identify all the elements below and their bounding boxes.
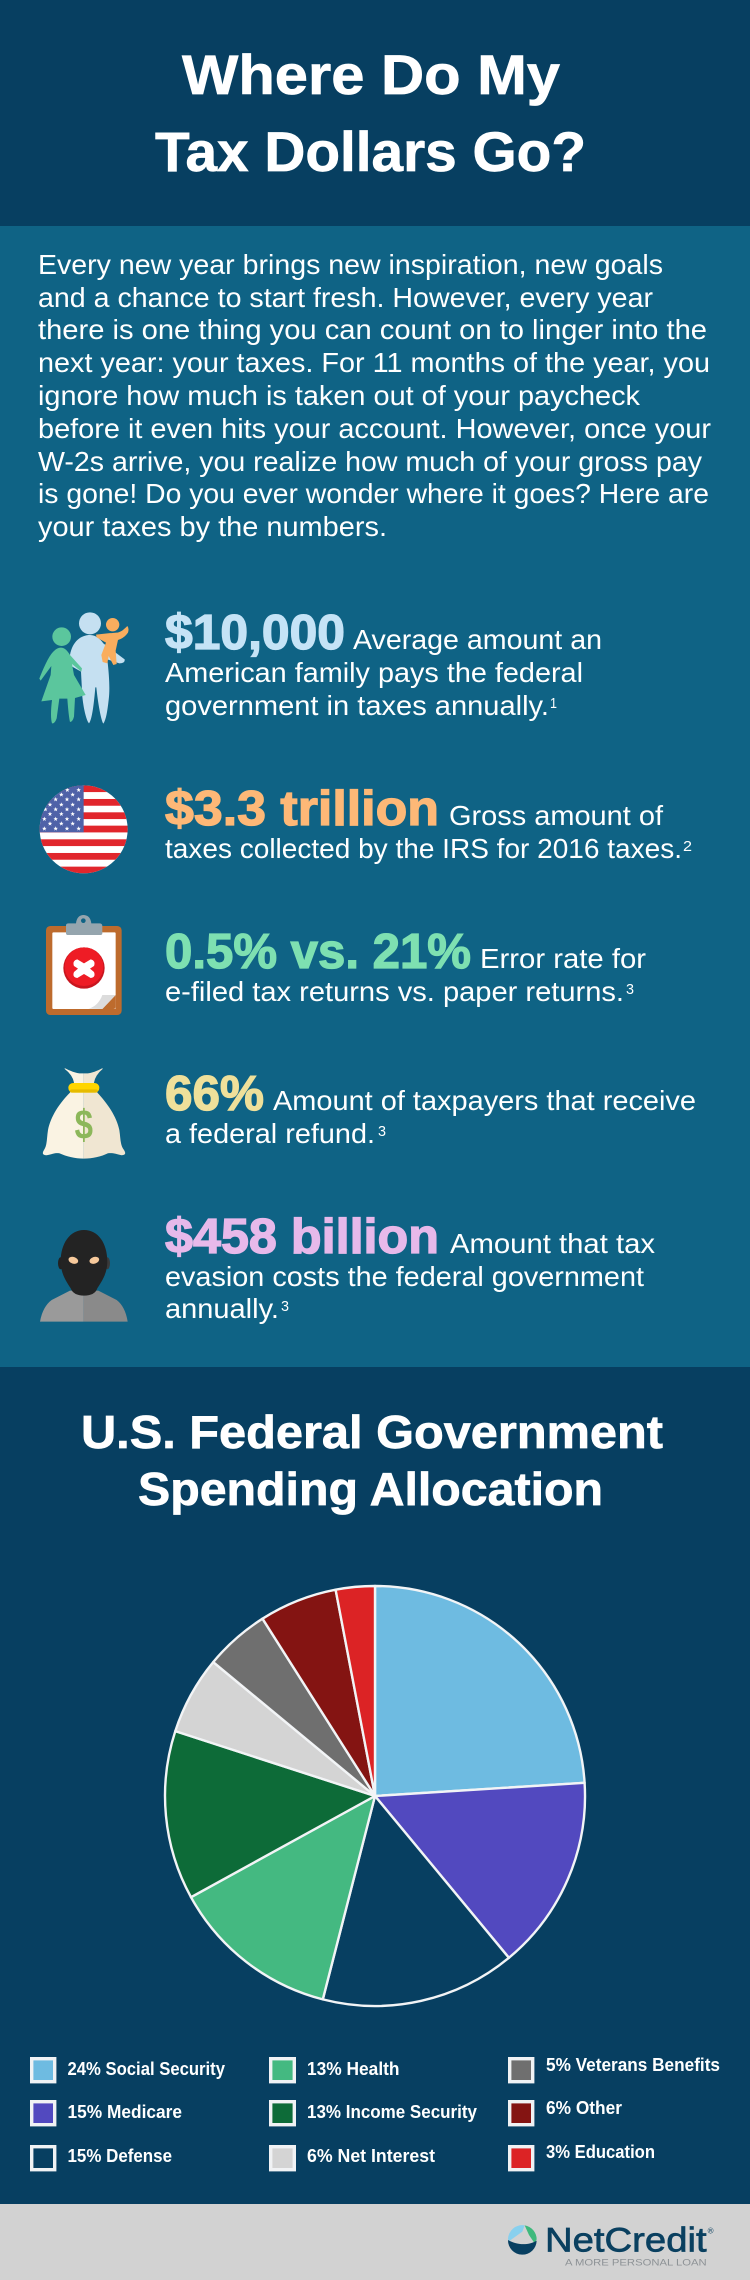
stat: 66 percent: 3 <box>378 1123 386 1140</box>
icon: family <box>39 612 129 724</box>
stat: 3.3 trillion: $3.3 trillion <box>165 782 439 836</box>
logo: NetCredit: A MORE PERSONAL LOAN <box>565 2257 707 2267</box>
stat: error rate <box>165 925 646 1007</box>
logo: NetCredit: ® <box>708 2226 714 2235</box>
stat: 458 billion: $458 billion <box>165 1210 439 1264</box>
stat: 458 billion <box>165 1210 655 1324</box>
stat: 458 billion: evasion costs the federal government <box>165 1261 644 1292</box>
intro paragraph: Every new year brings new inspiration, new goals <box>38 249 663 280</box>
intro paragraph: W-2s arrive, you realize how much of your gross pay <box>38 446 702 477</box>
icon: clipboard with error mark <box>46 915 122 1015</box>
intro paragraph: and a chance to start fresh. However, every year <box>38 282 653 313</box>
chart heading <box>81 1406 663 1515</box>
intro paragraph <box>38 249 711 542</box>
intro paragraph: ignore how much is taken out of your paycheck <box>38 380 640 411</box>
stat: 10,000: 1 <box>550 695 557 712</box>
chart heading: Spending Allocation <box>138 1463 603 1515</box>
stat: 10,000: $10,000 <box>165 606 345 660</box>
icon: american flag <box>38 783 130 875</box>
stat: 66 percent <box>165 1067 696 1149</box>
icon: money bag: $ <box>75 1101 93 1148</box>
stat: 10,000 <box>165 606 602 721</box>
intro paragraph: is gone! Do you ever wonder where it goes? Here are <box>38 478 709 509</box>
stat: 10,000: Average amount an <box>353 624 602 655</box>
panel: stats background <box>0 226 750 1367</box>
stat: error rate: e-filed tax returns vs. paper returns. <box>165 976 624 1007</box>
legend: 24% Social Security <box>68 2059 225 2079</box>
legend: 15% Defense <box>68 2146 172 2166</box>
intro paragraph: before it even hits your account. However, once your <box>38 413 711 444</box>
icon: money bag <box>43 1068 125 1159</box>
stat: 458 billion: Amount that tax <box>450 1228 655 1259</box>
stat: 3.3 trillion: Gross amount of <box>449 800 663 831</box>
legend: 13% Income Security <box>307 2102 477 2122</box>
legend <box>32 2055 720 2170</box>
stat: error rate: 3 <box>626 981 634 998</box>
legend: 6% Other <box>546 2098 622 2118</box>
stat: 10,000: American family pays the federal <box>165 657 583 688</box>
panel: spending allocation <box>0 1367 750 2204</box>
intro paragraph: next year: your taxes. For 11 months of the year, you <box>38 347 710 378</box>
stat: 458 billion: annually. <box>165 1293 279 1324</box>
legend: 6% Net Interest <box>307 2146 435 2166</box>
panel: footer <box>0 2204 750 2280</box>
stat: error rate: Error rate for <box>480 943 646 974</box>
intro paragraph: your taxes by the numbers. <box>38 511 387 542</box>
pie chart <box>165 1586 585 2006</box>
icon: masked thief <box>40 1230 128 1322</box>
legend: 15% Medicare <box>68 2102 182 2122</box>
panel: header <box>0 0 750 226</box>
stat: 66 percent: 66% <box>165 1067 264 1121</box>
title: Where Do My <box>182 43 560 106</box>
stat: 458 billion: 3 <box>281 1298 289 1315</box>
intro paragraph: there is one thing you can count on to linger into the <box>38 314 707 345</box>
title <box>155 43 586 183</box>
stat: 66 percent: a federal refund. <box>165 1118 375 1149</box>
legend: 5% Veterans Benefits <box>546 2055 720 2075</box>
legend: 3% Education <box>546 2142 655 2162</box>
stat: 3.3 trillion: taxes collected by the IRS for 2016 taxes. <box>165 833 682 864</box>
logo: NetCredit <box>508 2222 714 2267</box>
logo: NetCredit: NetCredit <box>545 2222 707 2260</box>
stat: 66 percent: Amount of taxpayers that receive <box>273 1085 696 1116</box>
stat: error rate: 0.5% vs. 21% <box>165 925 471 979</box>
stat: 3.3 trillion <box>165 782 692 864</box>
stat: 10,000: government in taxes annually. <box>165 690 549 721</box>
stat: 3.3 trillion: 2 <box>683 838 692 855</box>
legend: 13% Health <box>307 2059 400 2079</box>
title: Tax Dollars Go? <box>155 120 586 183</box>
chart heading: U.S. Federal Government <box>81 1406 663 1458</box>
